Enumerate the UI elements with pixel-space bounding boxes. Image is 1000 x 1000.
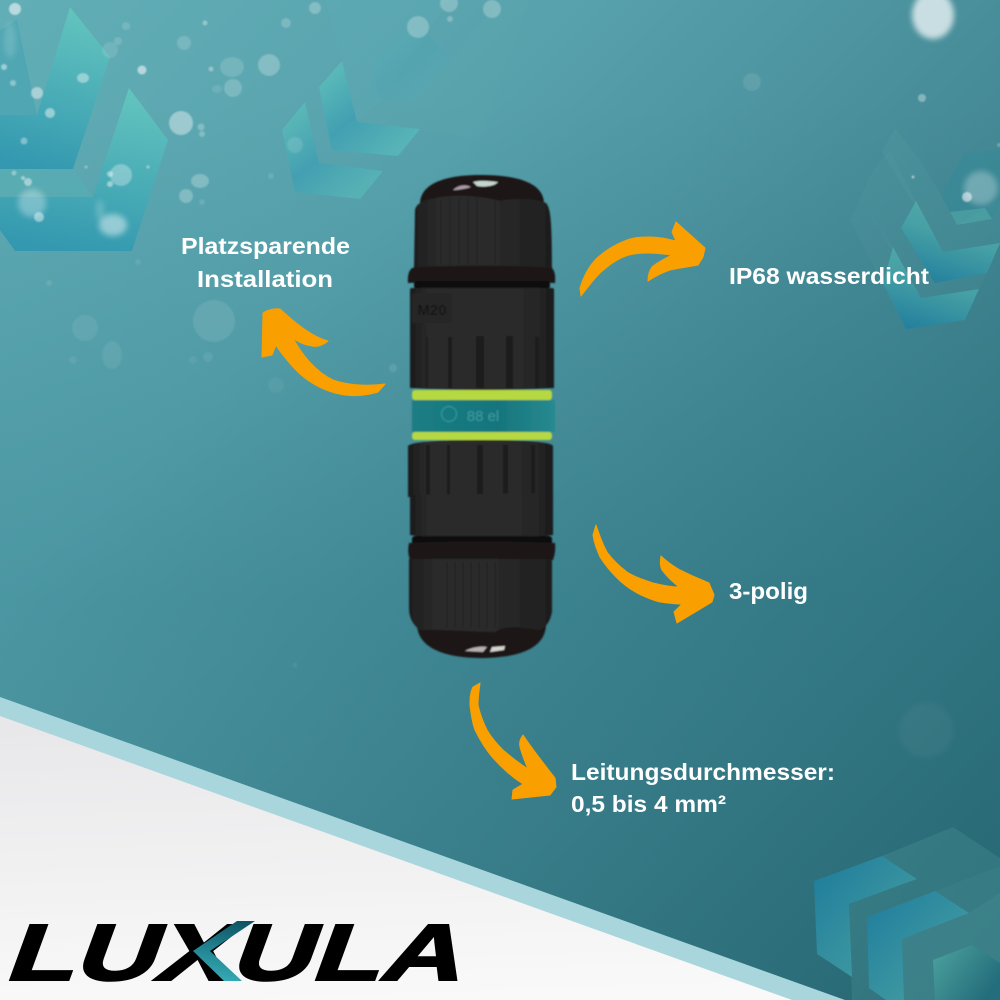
label: Platzsparende Installation [181,233,350,292]
M20 label plate [412,293,452,323]
label: IP68 wasserdicht: IP68 wasserdicht [729,263,929,289]
decorative shapes: top centre [282,0,530,199]
label: Platzsparende Installation: Installation [197,266,333,292]
lower knurled nut [409,559,552,632]
label: Leitungsdurchmesser: 0,5 bis 4 mm² [571,791,726,817]
decorative bubbles [1,0,1000,668]
upper nut ridges [432,198,538,265]
lower body [410,493,553,540]
upper ribbed collar [410,339,554,390]
arrow: to 3-polig [593,525,714,623]
logo accent chevron [193,921,255,981]
upper flange [408,266,555,283]
lower ribbed collar [408,440,553,497]
lower dome highlights [465,646,505,652]
teal centre band: 88 el [467,408,499,425]
lower collar ribs [408,445,553,495]
label: 3-polig: 3-polig [729,578,808,604]
dome highlights [453,181,498,190]
white corner wedge [0,716,792,1000]
decorative soft glows [4,0,998,758]
M20 label plate: M20 [417,302,447,319]
yellow seal upper [412,390,552,400]
lower flange shadow [412,536,552,545]
arrow: to Leitungsdurchmesser [470,683,556,799]
label: Leitungsdurchmesser: Leitungsdurchmesser: [571,759,835,785]
label: Leitungsdurchmesser [571,759,835,817]
light diagonal band [0,697,845,1000]
yellow seal lower [412,432,552,440]
upper knurled nut [414,196,552,268]
label: Platzsparende Installation: Platzsparende [181,233,350,259]
teal centre band [412,400,555,432]
logo: LUXULA: LUXULA [0,909,485,998]
decorative shapes: bottom right [814,827,1000,1000]
upper body [410,288,554,340]
upper flange shadow [414,281,550,289]
decorative shapes: right [850,128,1000,329]
top dome cap [420,175,544,204]
lower nut ridges [447,562,525,628]
connector product photo [408,175,555,658]
lower dome cap [417,625,546,658]
upper collar ribs [410,336,554,388]
decorative shapes: top left [0,7,168,251]
arrow: to IP68 wasserdicht [580,222,705,296]
lower flange [408,542,555,560]
arrow: to Platzsparende Installation [262,309,385,396]
